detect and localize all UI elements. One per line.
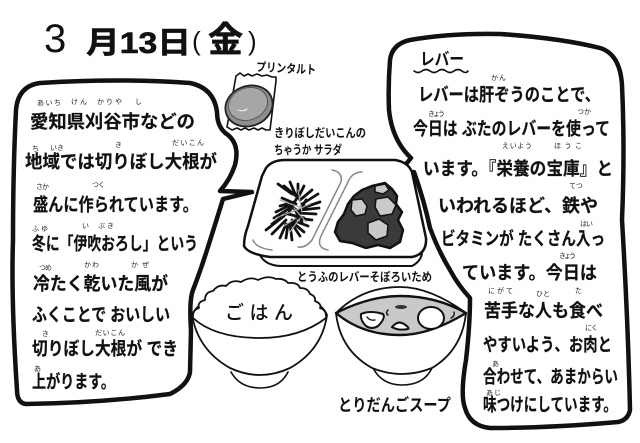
- label: tofu and liver stir-fry: とうふのレバーそぼろいため: [297, 270, 432, 284]
- title: 金: [208, 21, 243, 60]
- label: print tart: プリンタルト: [256, 60, 316, 77]
- text: kiriboshi explanation: 愛知県刈谷市などの: [30, 112, 195, 132]
- text: kiriboshi explanation: つく: [92, 181, 105, 189]
- text: kiriboshi explanation: いき: [50, 144, 64, 152]
- text: kiriboshi explanation: き: [42, 330, 49, 338]
- text: kiriboshi explanation: し: [135, 98, 142, 106]
- text: kiriboshi explanation: ち: [32, 145, 39, 153]
- text: kiriboshi explanation: [25, 98, 217, 392]
- text: liver explanation: にく: [585, 324, 598, 332]
- plate: [258, 250, 422, 266]
- text: liver explanation: います。『栄養の宝庫』と: [423, 158, 613, 179]
- label: chicken dumpling soup: とりだんごスープ: [338, 395, 451, 415]
- text: liver explanation: ビタミンが たくさん入っ: [441, 228, 605, 249]
- heading: liver: レバー: [420, 50, 464, 69]
- text: liver explanation: きょう: [559, 252, 576, 260]
- icon: print tart packet: [220, 73, 278, 133]
- text: kiriboshi explanation: あいち: [37, 99, 61, 107]
- text: kiriboshi explanation: ふくことで おいしい: [32, 305, 170, 325]
- text: liver explanation: あじ: [486, 389, 501, 397]
- text: kiriboshi explanation: あ: [34, 365, 41, 373]
- title: [44, 17, 257, 61]
- text: kiriboshi explanation: 上がります。: [32, 371, 115, 392]
- bubble outline right: [389, 34, 630, 428]
- text: liver explanation: てつ: [569, 183, 583, 190]
- text: liver explanation: いわれるほど、鉄や: [438, 196, 598, 216]
- text: kiriboshi explanation: さか: [36, 183, 49, 191]
- text: liver explanation: レバーは肝ぞうのことで、: [418, 85, 600, 105]
- food: liver and tofu: [335, 183, 403, 248]
- panel: kiriboshi daikon speech bubble: [12, 80, 252, 404]
- text: liver explanation: えいよう: [502, 142, 532, 150]
- text: liver explanation: 苦手な人も食べ: [484, 301, 603, 321]
- text: kiriboshi explanation: 盛んに作られています。: [33, 194, 198, 215]
- text: kiriboshi explanation: 冬に「伊吹おろし」という: [32, 234, 198, 254]
- text: liver explanation: はい: [580, 220, 593, 228]
- text: kiriboshi explanation: かわ: [84, 261, 99, 269]
- text: liver explanation: [413, 74, 618, 415]
- title: 3: [44, 17, 66, 61]
- text: liver explanation: ひと: [536, 290, 550, 298]
- icon: plate with side dishes: [244, 160, 426, 266]
- text: kiriboshi explanation: かぜ: [131, 261, 149, 269]
- title: 月13日: [86, 27, 191, 60]
- text: kiriboshi explanation: 地域では切りぼし大根が: [25, 151, 217, 172]
- title: ): [248, 26, 257, 56]
- plate dividers: [298, 170, 341, 247]
- label: kiriboshi daikon salad: ちゃうか サラダ: [274, 142, 342, 157]
- text: liver explanation: つか: [577, 108, 591, 116]
- icon: rice bowl: [192, 277, 327, 388]
- text: liver explanation: きょう: [428, 110, 445, 118]
- text: kiriboshi explanation: かりや: [97, 98, 122, 106]
- text: liver explanation: にがて: [488, 286, 513, 295]
- text: liver explanation: かん: [491, 74, 506, 82]
- text: liver explanation: あ: [492, 360, 499, 368]
- food: kiriboshi salad: [266, 182, 320, 240]
- text: kiriboshi explanation: 冷たく乾いた風が: [33, 273, 168, 294]
- text: kiriboshi explanation: だいこん: [172, 139, 204, 147]
- text: kiriboshi explanation: き: [115, 141, 122, 149]
- text: liver explanation: やすいよう、お肉と: [483, 335, 612, 355]
- title: (: [192, 26, 201, 56]
- label: kiriboshi daikon salad: [274, 126, 366, 157]
- text: kiriboshi explanation: けん: [71, 98, 87, 106]
- text: kiriboshi explanation: い: [82, 222, 89, 230]
- text: liver explanation: ています。今日は: [462, 262, 597, 283]
- text: liver explanation: た: [575, 287, 582, 295]
- text: kiriboshi explanation: ぶき: [98, 222, 114, 230]
- text: kiriboshi explanation: だいこん: [95, 329, 125, 337]
- text: kiriboshi explanation: つめ: [39, 264, 52, 272]
- text: liver explanation: ほうこ: [554, 142, 582, 150]
- text: kiriboshi explanation: ふゆ: [32, 225, 48, 233]
- bubble outline left: [12, 80, 252, 404]
- panel: liver speech bubble: [389, 34, 630, 428]
- label: kiriboshi daikon salad: きりぼしだいこんの: [274, 126, 366, 140]
- icon: soup bowl: [336, 287, 466, 385]
- label: rice: ごはん: [225, 302, 293, 324]
- text: kiriboshi explanation: 切りぼし大根が でき: [32, 338, 178, 359]
